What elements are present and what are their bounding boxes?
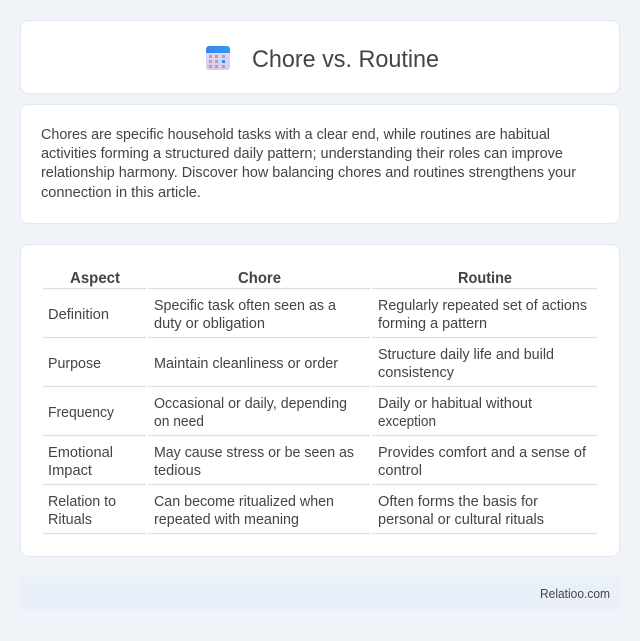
footer xyxy=(20,577,620,611)
intro paragraph: activities forming a structured daily pattern; understanding their roles can improve xyxy=(41,146,563,162)
row: definition xyxy=(48,298,587,332)
row: frequency xyxy=(48,396,532,430)
row: emotional impact: Emotional xyxy=(48,445,113,461)
title: Chore vs. Routine xyxy=(252,46,439,73)
row: definition: duty or obligation xyxy=(154,316,265,332)
row: emotional impact: control xyxy=(378,463,422,479)
row: emotional impact: May cause stress or be seen as xyxy=(154,445,354,461)
row: definition: Regularly repeated set of actions xyxy=(378,298,587,314)
panel: introduction xyxy=(20,104,620,224)
row: relation to rituals: personal or cultural rituals xyxy=(378,512,544,528)
row: purpose: Structure daily life and build xyxy=(378,347,554,363)
row: relation to rituals: Can become ritualized when xyxy=(154,494,334,510)
row: frequency: exception xyxy=(378,414,436,430)
row: purpose: Maintain cleanliness or order xyxy=(154,356,338,372)
intro paragraph: connection in this article. xyxy=(41,185,201,201)
row: emotional impact: Provides comfort and a sense of xyxy=(378,445,587,461)
row: frequency: Occasional or daily, depending xyxy=(154,396,347,412)
row: emotional impact: tedious xyxy=(154,463,201,479)
row: frequency: Daily or habitual without xyxy=(378,396,532,412)
row: definition: Specific task often seen as a xyxy=(154,298,337,314)
intro paragraph: relationship harmony. Discover how balancing chores and routines strengthens your xyxy=(41,165,576,181)
row: purpose xyxy=(48,347,554,381)
row: purpose: consistency xyxy=(378,365,455,381)
intro paragraph: Chores are specific household tasks with a clear end, while routines are habitual xyxy=(41,127,550,143)
intro paragraph xyxy=(41,127,576,201)
row: relation to rituals xyxy=(48,494,544,528)
table header xyxy=(70,270,512,287)
panel: comparison table xyxy=(20,244,620,556)
row: frequency: Frequency xyxy=(48,405,115,421)
row: relation to rituals: Relation to xyxy=(48,494,116,510)
row: definition: Definition xyxy=(48,307,109,323)
row: relation to rituals: Often forms the basis for xyxy=(378,494,538,510)
footer brand text: Relatioo.com xyxy=(540,587,610,601)
row: frequency: on need xyxy=(154,414,204,430)
table header: Aspect xyxy=(70,270,121,287)
row: relation to rituals: repeated with meaning xyxy=(154,512,299,528)
row: relation to rituals: Rituals xyxy=(48,512,92,528)
row: definition: forming a pattern xyxy=(378,316,487,332)
icon: calendar xyxy=(206,46,230,70)
row: emotional impact xyxy=(48,445,587,479)
panel: title header xyxy=(20,20,620,94)
table header: Chore xyxy=(238,270,281,287)
row: emotional impact: Impact xyxy=(48,463,92,479)
row: purpose: Purpose xyxy=(48,356,101,372)
table header: Routine xyxy=(458,270,512,287)
